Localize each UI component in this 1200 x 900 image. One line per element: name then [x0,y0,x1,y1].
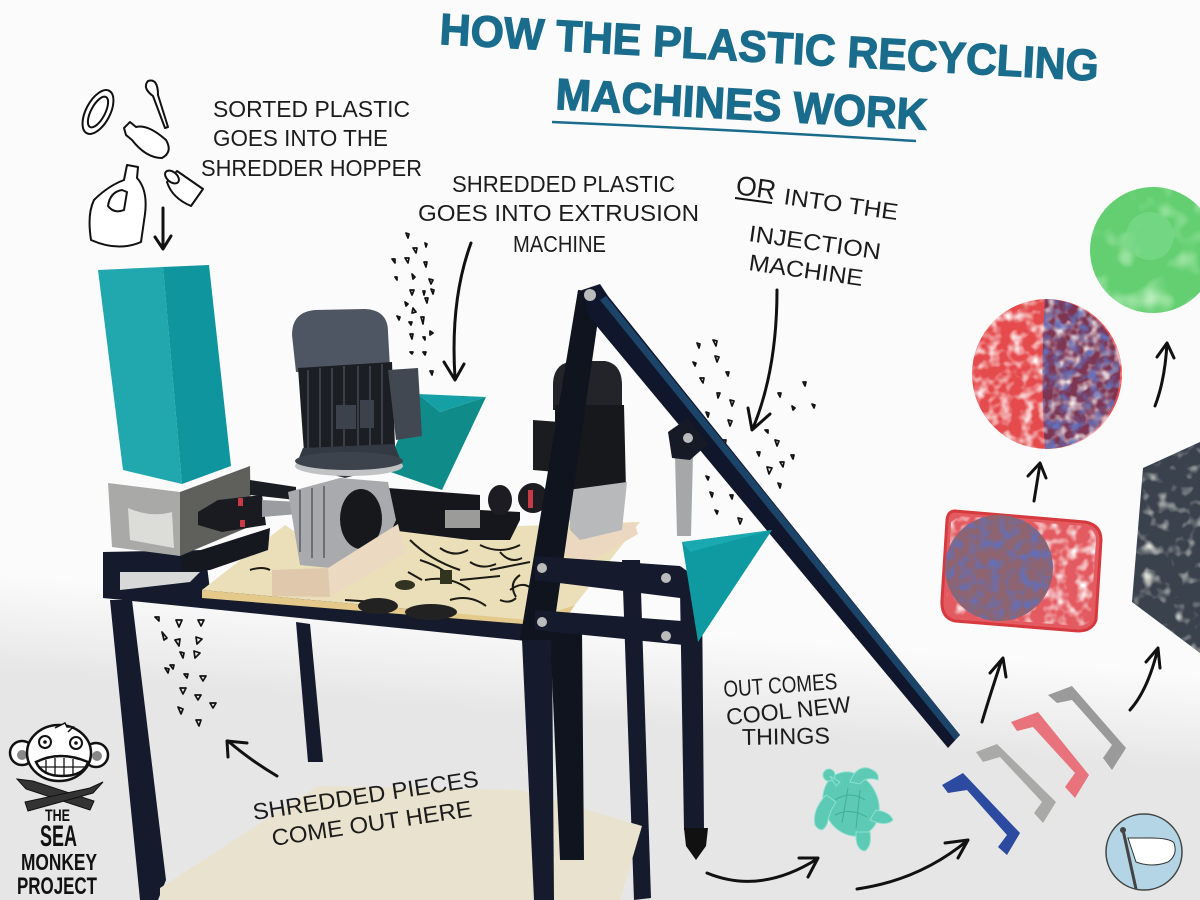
machine: extruder barrel [388,483,548,540]
monkey face [10,723,108,781]
lower wood shelf [160,786,642,900]
label: sorted plastic [201,96,422,181]
label: sorted plastic: GOES INTO THE [213,125,388,151]
logo: white flag [1106,814,1182,890]
machine: extrusion hopper [385,394,486,490]
logo: sea monkey project: MONKEY [21,849,97,875]
title [438,5,1100,141]
label: shredded pieces [251,766,480,851]
label: sorted plastic: SHREDDER HOPPER [201,155,422,181]
label: shredded pieces: COME OUT HERE [270,795,474,851]
label: injection: INTO THE [782,183,900,225]
machine: injection lever arm [582,284,960,748]
arrow: to extrusion [444,243,471,380]
arrow: to shredded pieces [227,741,277,776]
label: injection: OR [734,170,778,206]
label: injection [734,170,900,291]
label: shredded plastic: MACHINE [513,231,606,257]
crossed pencils [17,779,103,811]
machine: second motor [533,361,627,540]
logo: sea monkey project: SEA [40,820,77,853]
machine: injection piston [668,418,708,536]
product: green plate [1090,187,1200,313]
product: handles [942,686,1126,855]
machine: shredder box [108,466,270,572]
logo: sea monkey project: PROJECT [17,873,97,900]
label: injection: MACHINE [747,249,865,291]
label: shredded plastic [418,171,699,257]
machine: first motor [292,309,422,478]
logo: sea monkey project [10,723,108,900]
label: shredded plastic: GOES INTO EXTRUSION [418,200,699,226]
arrow: into hopper [155,208,171,249]
machine: shredder hopper [98,265,231,484]
machine: shaft and coupling [198,480,298,532]
label: new things: THINGS [742,722,830,750]
logo: sea monkey project: THE [45,806,70,825]
label: injection: INJECTION [747,220,883,264]
label: shredded plastic: SHREDDED PLASTIC [452,171,675,197]
particles: output [155,617,216,726]
machine: shredder stand frame [103,550,651,900]
arrows: to products [707,343,1174,889]
product: turtle [813,763,893,851]
machine: injection frame [520,290,708,900]
wood blocks [272,522,638,597]
product: rectangular tray [942,511,1101,631]
particles: extrusion [392,233,434,375]
machine: first gearbox [288,478,396,568]
icons: plastic items [76,81,203,247]
particles: injection [693,340,815,524]
title: HOW THE PLASTIC RECYCLING [438,5,1100,91]
label: new things: OUT COMES [723,668,838,702]
product: red and blue plate [972,299,1122,449]
arrow: to injection [748,290,777,430]
wood board with doodles [202,522,640,627]
label: shredded pieces: SHREDDED PIECES [251,766,480,825]
title: MACHINES WORK [554,70,929,140]
label: new things: COOL NEW [725,691,852,730]
label: new things [723,668,852,750]
machine: injection hopper [682,530,772,642]
label: sorted plastic: SORTED PLASTIC [213,96,410,122]
product: hexagon tray [1132,442,1200,653]
